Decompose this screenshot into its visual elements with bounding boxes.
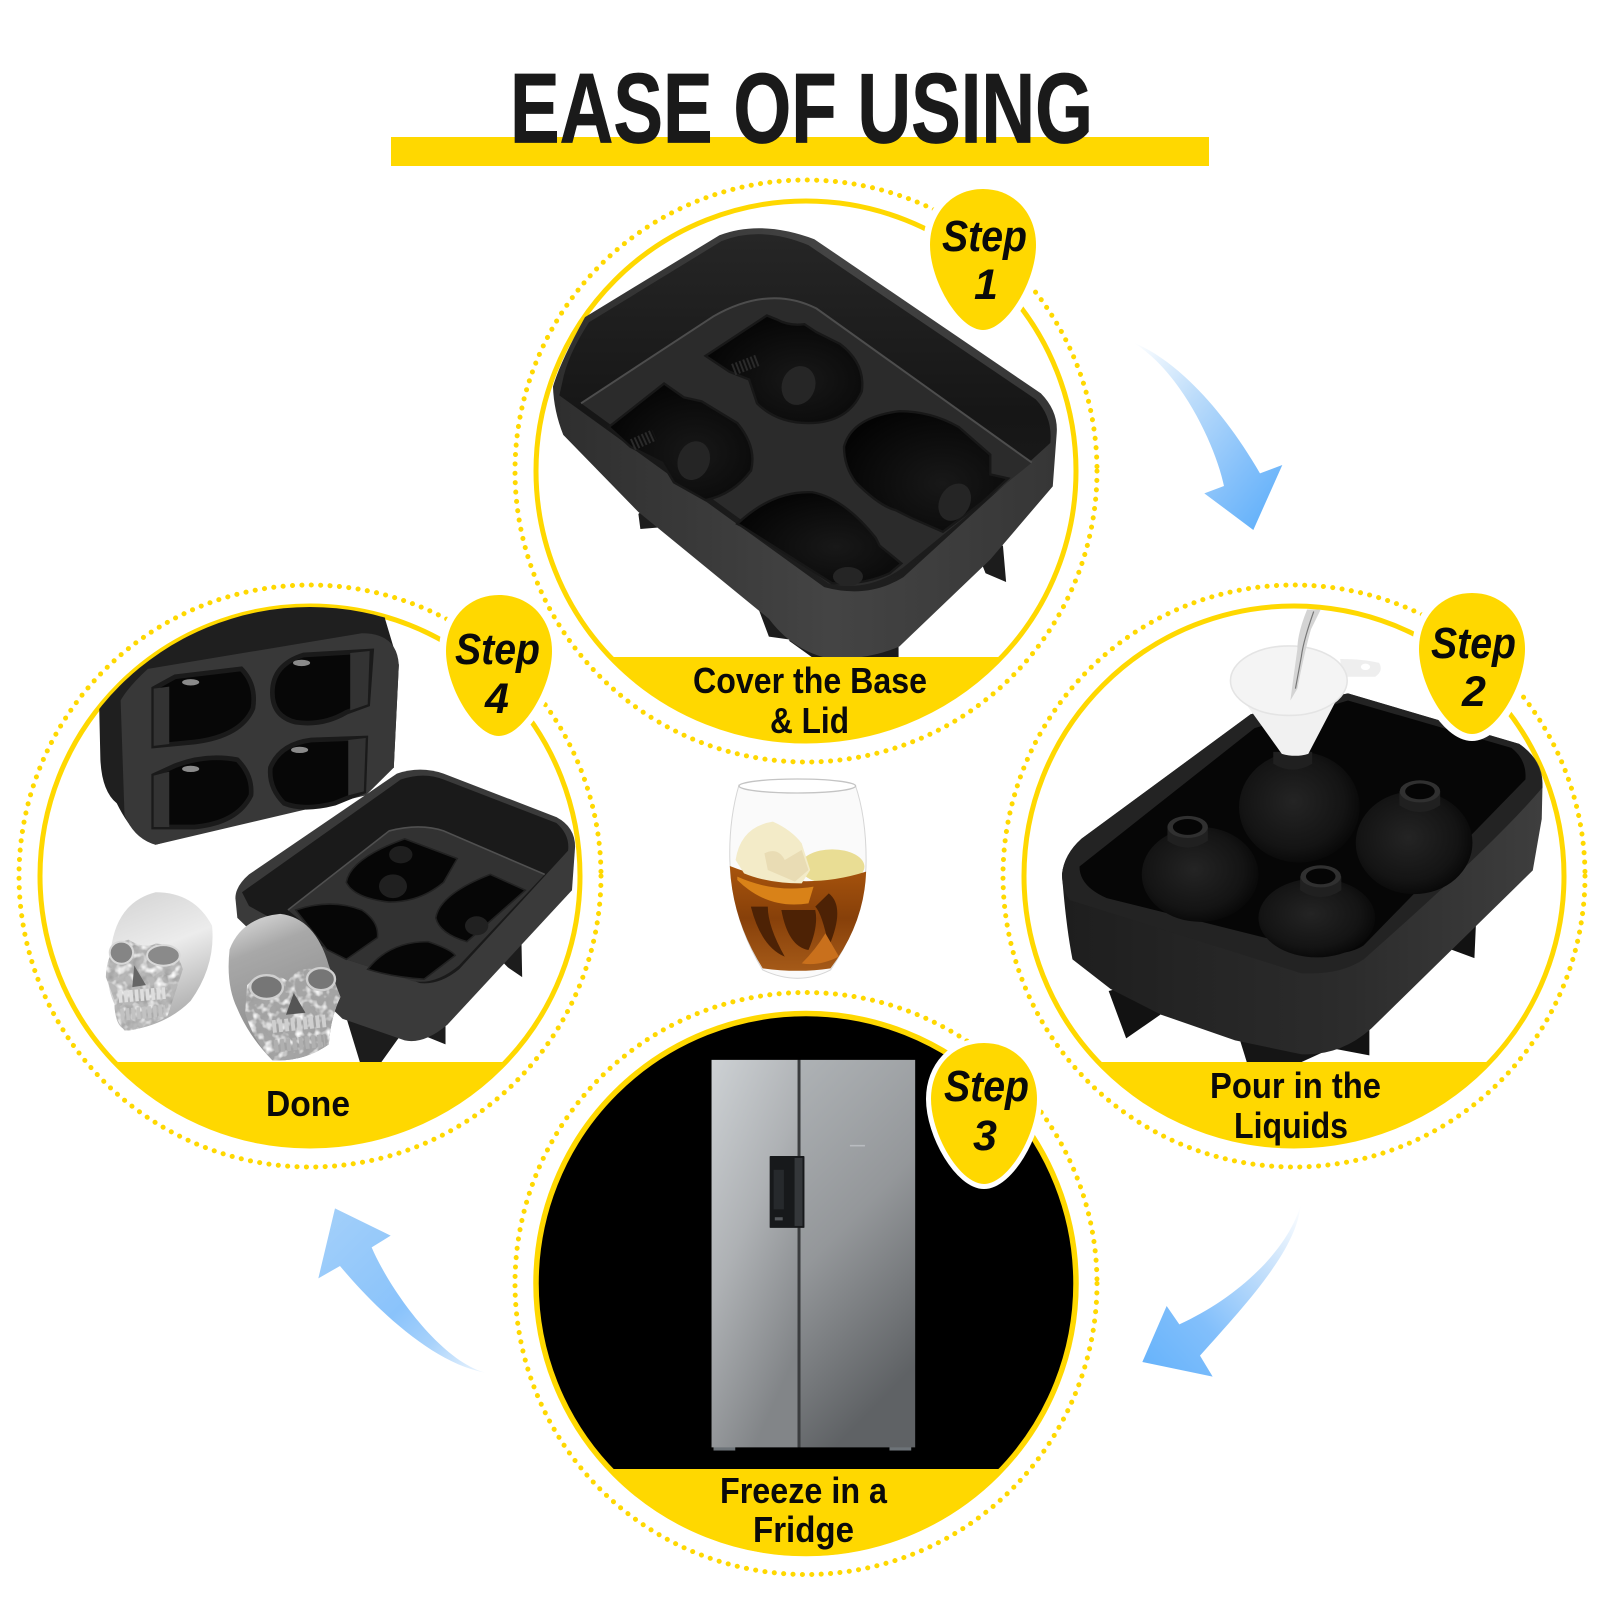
caption: Liquids (1234, 1105, 1348, 1146)
panel: step 2 pour in the liquids (1003, 585, 1585, 1167)
yellow caption band (614, 657, 998, 738)
panel: step 4 done (19, 585, 601, 1167)
caption: Pour in the (1210, 1065, 1381, 1106)
step 1 badge (930, 189, 1036, 330)
step 2 badge: Step (1431, 619, 1516, 668)
fridge (712, 1060, 915, 1451)
title (391, 52, 1209, 166)
caption: Freeze in a (720, 1470, 888, 1511)
step 4 badge: 4 (484, 675, 509, 723)
step 3 badge (931, 1043, 1037, 1184)
step 4 badge (446, 595, 552, 736)
caption (1210, 1065, 1381, 1146)
caption: Fridge (753, 1509, 854, 1550)
yellow caption band (118, 1062, 502, 1144)
solid ring (536, 201, 1076, 741)
title text: EASE OF USING (510, 52, 1093, 164)
dotted ring (515, 992, 1097, 1574)
panel: step 3 freeze in a fridge (515, 992, 1097, 1574)
step 2 badge (1419, 593, 1525, 734)
yellow caption band (608, 1469, 1004, 1556)
dotted ring (1003, 585, 1585, 1167)
caption: Cover the Base (693, 660, 927, 701)
solid ring (1024, 606, 1564, 1146)
arrow: step 2 to step 3 (1142, 1205, 1301, 1377)
caption (720, 1470, 888, 1550)
step 1 badge: 1 (974, 261, 998, 309)
step 3 badge: 3 (973, 1112, 997, 1160)
tray base photo (553, 228, 1057, 660)
caption (693, 660, 927, 741)
step 4 badge: Step (455, 625, 540, 674)
step 3 badge: Step (944, 1062, 1029, 1111)
step 1 badge: Step (942, 212, 1027, 261)
arrow: step 1 to step 2 (1133, 343, 1282, 530)
glass of whiskey with skull ice (730, 779, 866, 978)
arrow: step 3 to step 4 (318, 1208, 485, 1373)
step 2 badge: 2 (1461, 668, 1486, 716)
caption: & Lid (770, 700, 849, 741)
panel: step 1 cover the base and lid (515, 180, 1097, 762)
solid ring (40, 606, 580, 1146)
lid, tray and ice skulls photo (99, 607, 576, 1062)
black disc with yellow ring (536, 1014, 1076, 1554)
dotted ring (19, 585, 601, 1167)
title underline bar (391, 137, 1209, 166)
caption: Done (266, 1083, 350, 1124)
yellow caption band (1102, 1062, 1486, 1144)
dotted ring (515, 180, 1097, 762)
filled tray with funnel photo (1062, 610, 1543, 1062)
